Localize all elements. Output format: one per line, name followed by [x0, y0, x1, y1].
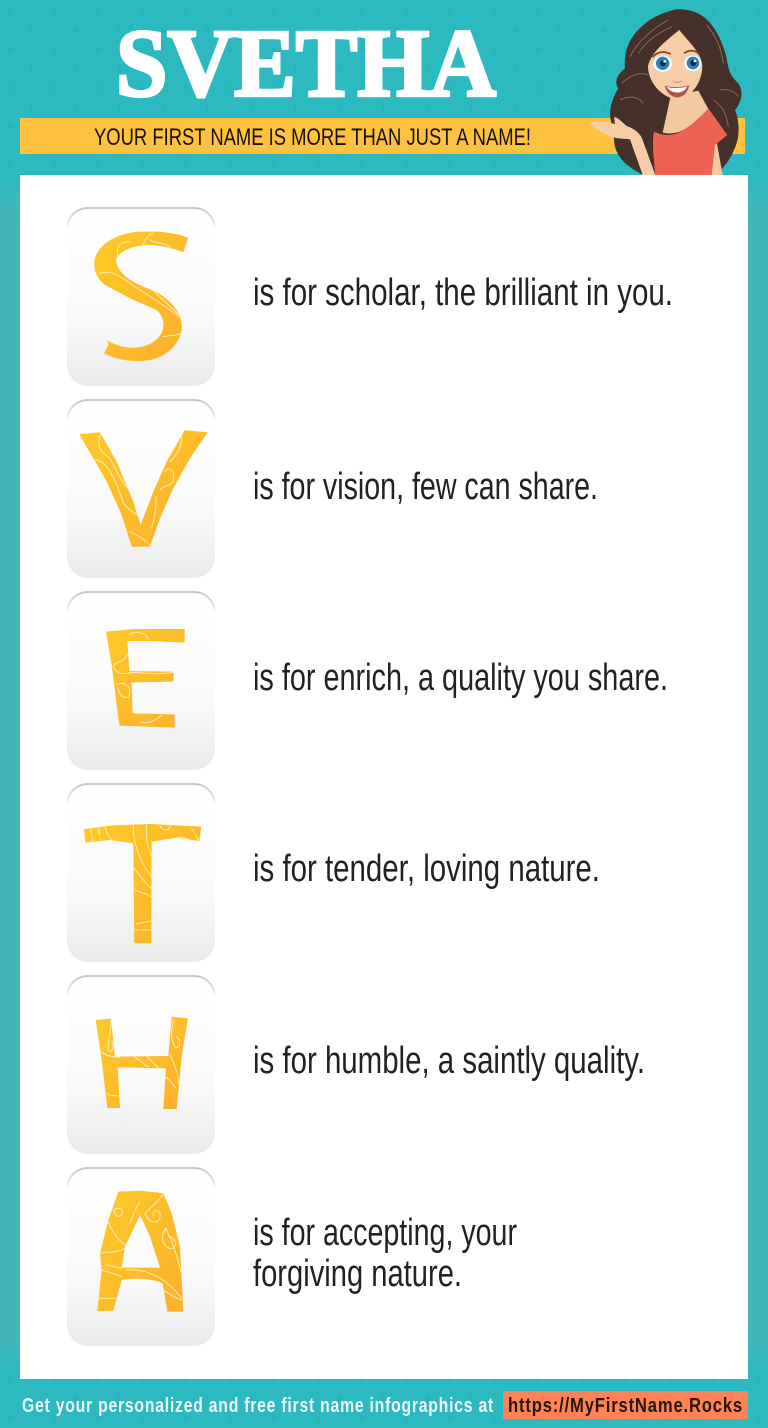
letter E [106, 629, 185, 728]
text H: is for humble, a saintly quality. [253, 1040, 645, 1082]
nose [673, 81, 682, 82]
banner tagline: YOUR FIRST NAME IS MORE THAN JUST A NAME! [94, 124, 531, 151]
hair [610, 9, 741, 175]
text A [253, 1212, 517, 1295]
hair highlights [620, 20, 738, 127]
smile [665, 85, 689, 97]
footer call to action: Get your personalized and free first name infographics at [22, 1395, 494, 1417]
text V: is for vision, few can share. [253, 466, 598, 508]
neck [663, 91, 709, 133]
right eye [684, 56, 701, 71]
face [648, 30, 702, 100]
letter H [96, 1017, 188, 1109]
letter A [97, 1191, 183, 1312]
letter tile T [67, 783, 215, 962]
text A: is for accepting, your [253, 1212, 517, 1254]
letter tile E [67, 591, 215, 770]
right arm [712, 144, 723, 175]
row S [67, 207, 673, 386]
letter tile A [67, 1167, 215, 1346]
row E [67, 591, 668, 770]
eyebrows [653, 51, 699, 57]
left eye [653, 56, 672, 72]
row H [67, 975, 645, 1154]
letter S [94, 232, 188, 361]
banner strip [20, 118, 745, 154]
letter tile V [67, 399, 215, 578]
letter tile S [67, 207, 215, 386]
white content panel [20, 175, 748, 1379]
letter tile H [67, 975, 215, 1154]
letter V [79, 430, 208, 547]
row V [67, 399, 598, 578]
title: SVETHA [116, 10, 496, 116]
row A [67, 1167, 517, 1346]
text A: forgiving nature. [253, 1253, 462, 1295]
raised arm and hand [590, 117, 655, 175]
shirt [653, 108, 727, 175]
row T [67, 783, 600, 962]
teeth [667, 87, 687, 93]
text T: is for tender, loving nature. [253, 848, 600, 890]
character illustration: woman presenting [590, 9, 741, 175]
letter T [84, 824, 201, 943]
